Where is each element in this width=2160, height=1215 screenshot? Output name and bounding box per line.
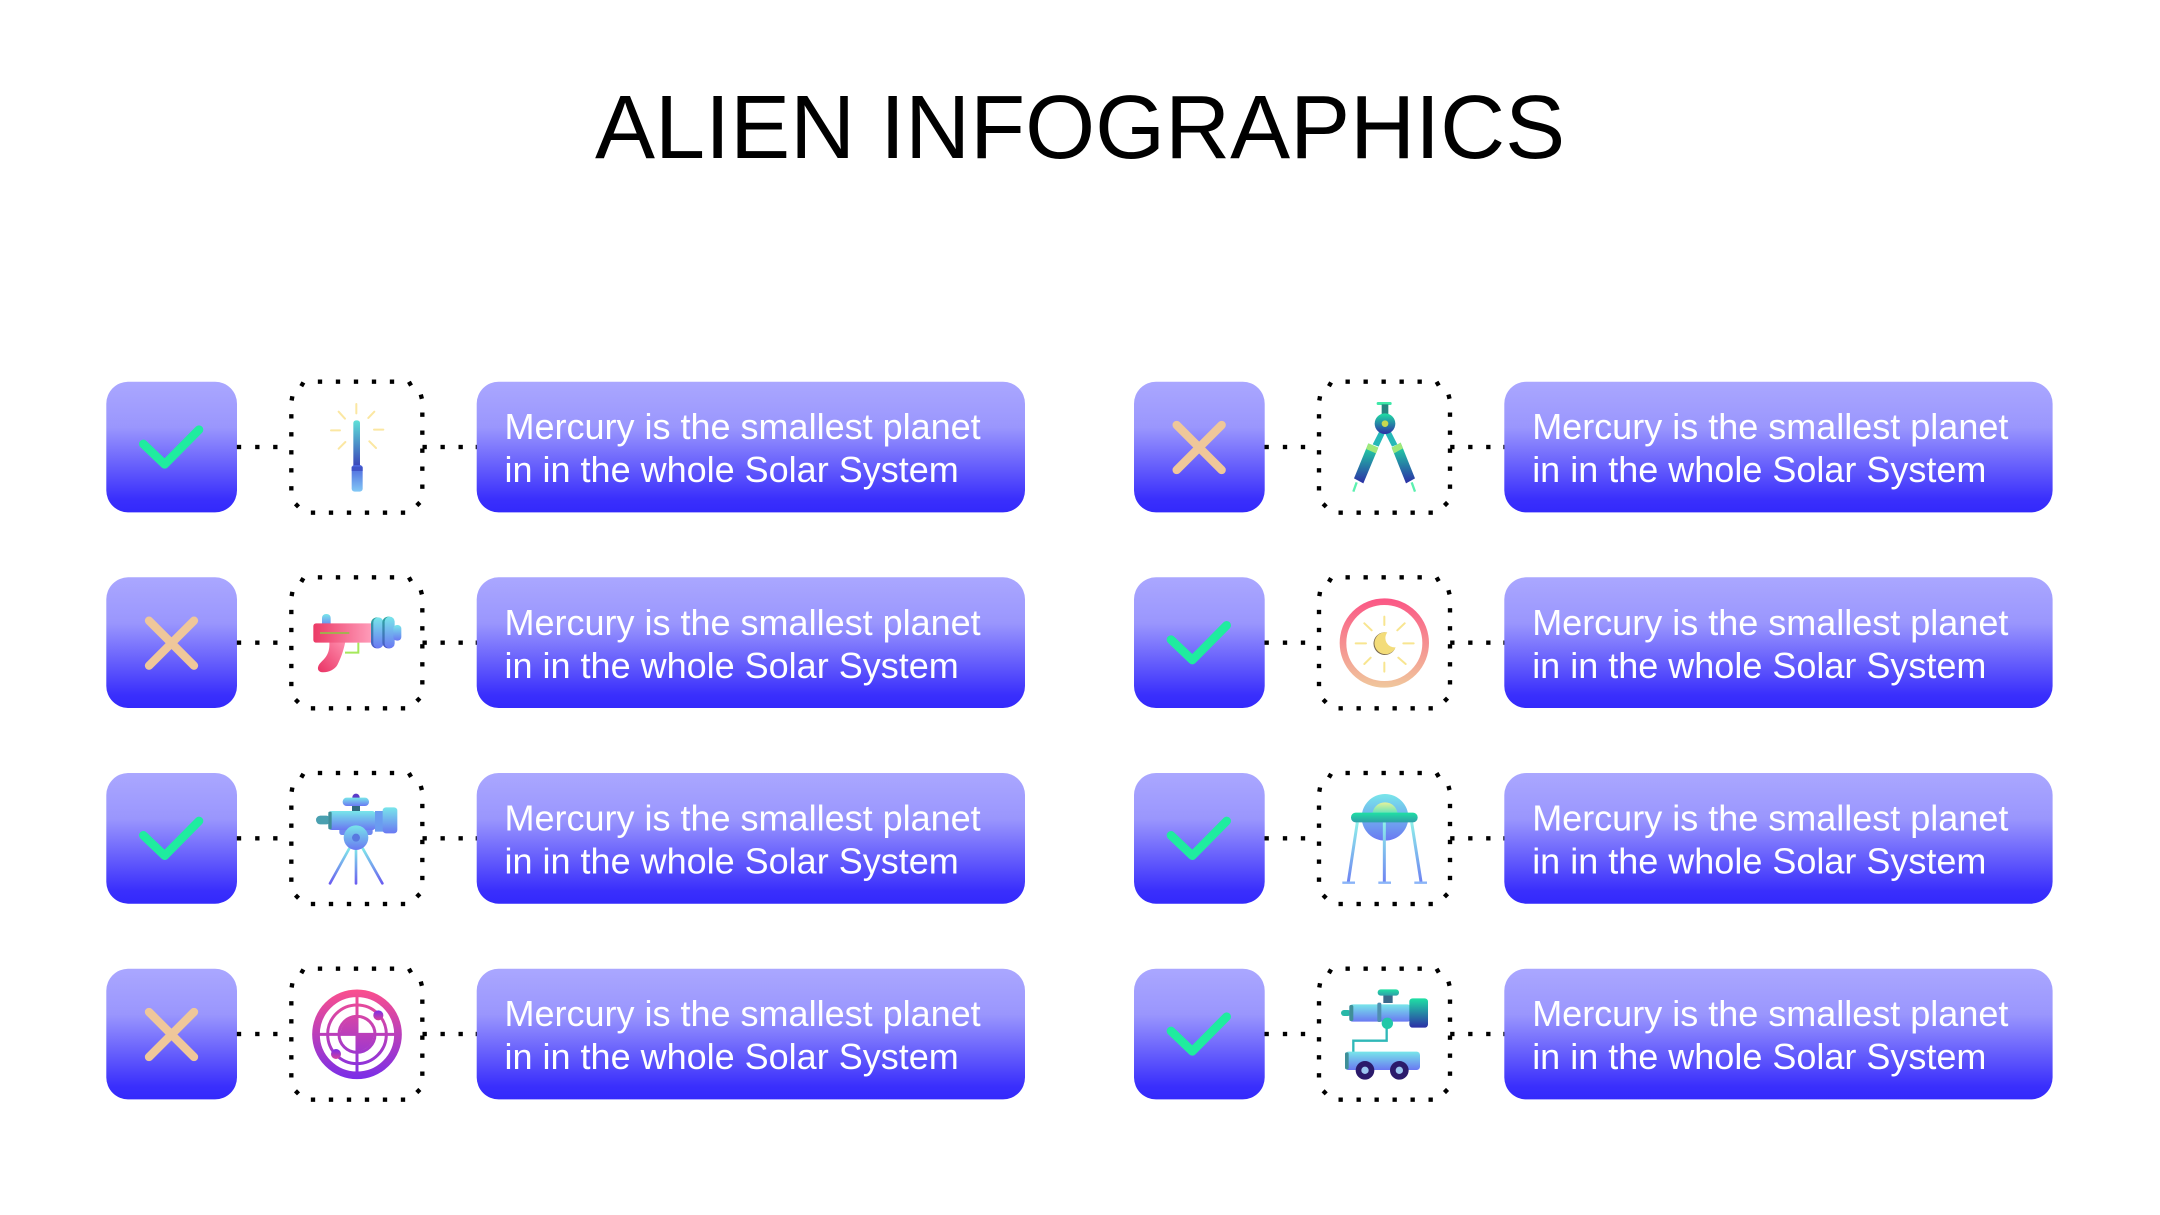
icon: ray gun bbox=[313, 614, 401, 672]
status box: cross bbox=[106, 969, 237, 1099]
icon: check mark bbox=[143, 430, 199, 464]
row 1 left bbox=[106, 379, 1025, 515]
dotted icon frame and connectors bbox=[237, 379, 480, 515]
icon: magic wand bbox=[331, 404, 383, 492]
dotted icon frame and connectors bbox=[237, 575, 480, 711]
icon: drawing compass bbox=[1353, 402, 1415, 492]
description text: in in the whole Solar System bbox=[1532, 645, 1986, 686]
text box bbox=[1504, 773, 2053, 904]
dotted icon frame and connectors bbox=[1265, 379, 1508, 515]
icon: cross mark bbox=[149, 621, 194, 666]
row 4 right bbox=[1134, 966, 2053, 1102]
row 4 left bbox=[106, 966, 1025, 1102]
status box: check bbox=[106, 382, 237, 512]
description text: Mercury is the smallest planet bbox=[504, 602, 981, 643]
icon: lander on legs bbox=[1342, 794, 1427, 883]
icon: check mark bbox=[1171, 821, 1227, 856]
dotted icon frame and connectors bbox=[237, 966, 480, 1102]
description text: in in the whole Solar System bbox=[1532, 840, 1986, 882]
text box bbox=[477, 773, 1025, 904]
description text: Mercury is the smallest planet bbox=[504, 993, 981, 1034]
row 3 left bbox=[106, 771, 1025, 906]
description text: in in the whole Solar System bbox=[1532, 449, 1986, 490]
description text: in in the whole Solar System bbox=[504, 840, 959, 882]
text box bbox=[477, 577, 1025, 708]
description text: Mercury is the smallest planet bbox=[504, 798, 981, 838]
title: ALIEN INFOGRAPHICS bbox=[595, 78, 1565, 178]
description text: Mercury is the smallest planet bbox=[1532, 798, 2008, 838]
text box bbox=[1504, 969, 2053, 1099]
dotted icon frame and connectors bbox=[237, 771, 480, 906]
icon: check mark bbox=[143, 821, 199, 856]
status box: check bbox=[1134, 577, 1265, 708]
icon: cross mark bbox=[1177, 425, 1222, 470]
text box bbox=[477, 969, 1025, 1099]
status box: cross bbox=[106, 577, 237, 708]
description text: in in the whole Solar System bbox=[1532, 1036, 1986, 1077]
status box: check bbox=[106, 773, 237, 904]
dotted icon frame and connectors bbox=[1265, 771, 1508, 906]
description text: in in the whole Solar System bbox=[504, 449, 959, 490]
status box: check bbox=[1134, 969, 1265, 1099]
description text: Mercury is the smallest planet bbox=[1532, 406, 2008, 447]
icon: check mark bbox=[1171, 625, 1227, 660]
description text: Mercury is the smallest planet bbox=[1532, 993, 2008, 1034]
text box bbox=[1504, 382, 2053, 512]
row 2 left bbox=[106, 575, 1025, 711]
row 3 right bbox=[1134, 771, 2053, 906]
icon: radar target bbox=[313, 990, 401, 1079]
text box bbox=[477, 382, 1025, 512]
description text: Mercury is the smallest planet bbox=[1532, 602, 2008, 643]
description text: in in the whole Solar System bbox=[504, 645, 959, 686]
description text: Mercury is the smallest planet bbox=[504, 406, 981, 447]
description text: in in the whole Solar System bbox=[504, 1036, 959, 1077]
status box: check bbox=[1134, 773, 1265, 904]
dotted icon frame and connectors bbox=[1265, 966, 1508, 1102]
icon: check mark bbox=[1171, 1017, 1227, 1051]
status box: cross bbox=[1134, 382, 1265, 512]
icon: cross mark bbox=[149, 1012, 194, 1057]
text box bbox=[1504, 577, 2053, 708]
icon: telescope rover bbox=[1341, 989, 1428, 1080]
dotted icon frame and connectors bbox=[1265, 575, 1508, 711]
icon: sun and moon dial bbox=[1343, 602, 1426, 684]
row 2 right bbox=[1134, 575, 2053, 711]
icon: telescope on tripod bbox=[316, 794, 397, 883]
row 1 right bbox=[1134, 379, 2053, 515]
